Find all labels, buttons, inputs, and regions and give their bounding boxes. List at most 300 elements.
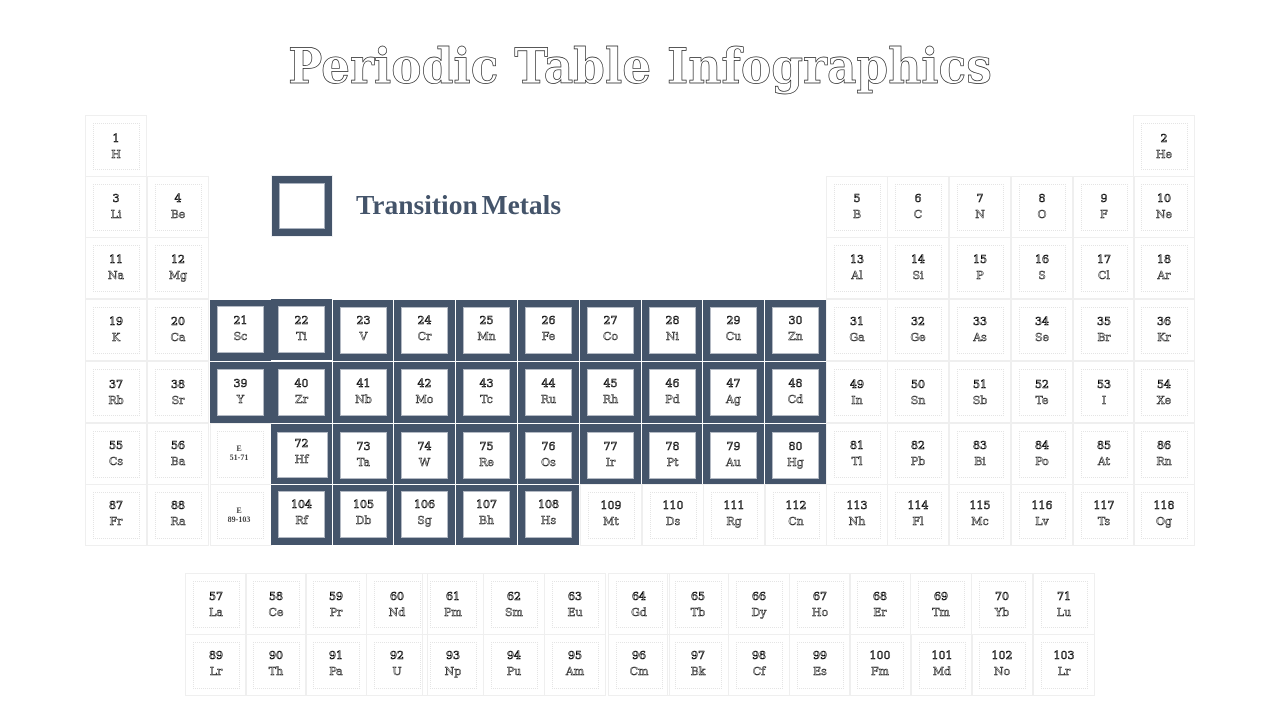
cell: Ds: 110: [662, 499, 684, 512]
cell: Pt, transition metal: 78: [666, 440, 680, 453]
cell: Tc, transition metal: [456, 362, 517, 423]
cell: Fe, transition metal: [518, 300, 579, 361]
cell: Gd: [608, 573, 670, 635]
cell: Li: 3: [112, 192, 120, 205]
cell: Re, transition metal: Re: [479, 456, 494, 469]
cell: V, transition metal: 23: [356, 314, 370, 327]
cell: Cu, transition metal: Cu: [726, 330, 741, 343]
cell: Og: 118: [1154, 499, 1174, 512]
cell: Rn: [1133, 423, 1195, 485]
cell: Cn: [765, 484, 827, 546]
cell: Rh, transition metal: [580, 362, 641, 423]
cell: Cd, transition metal: [765, 362, 826, 423]
cell: Ge: Ge: [910, 331, 926, 344]
lanthanide and actinide series: [185, 573, 1095, 696]
cell: Ag, transition metal: [703, 362, 764, 423]
cell: Fm: [849, 634, 911, 696]
cell: Xe: Xe: [1157, 394, 1171, 407]
cell: Lv: 116: [1032, 499, 1052, 512]
cell: Be: [147, 176, 209, 238]
cell: Fm: 100: [870, 649, 890, 662]
cell: Nd: [366, 573, 428, 635]
cell: Cf: [728, 634, 790, 696]
cell: Pa: 91: [329, 649, 343, 662]
cell: Ar: 18: [1157, 253, 1171, 266]
cell: B: B: [853, 208, 861, 221]
cell: Ti, transition metal: [271, 299, 332, 360]
cell: Hs, transition metal: Hs: [541, 514, 556, 527]
cell: Zr, transition metal: [271, 362, 332, 423]
cell: Tm: 69: [934, 590, 948, 603]
cell: Ta, transition metal: [333, 424, 393, 484]
cell: No: 102: [992, 649, 1012, 662]
cell: Tm: [910, 573, 972, 635]
cell: Se: [1011, 299, 1073, 361]
cell: B: 5: [854, 192, 860, 205]
cell: Fl: 114: [908, 499, 928, 512]
cell: Er: [849, 573, 911, 635]
cell: Cr, transition metal: [394, 300, 455, 361]
cell: K: [85, 299, 147, 361]
cell: Cm: [608, 634, 670, 696]
cell: Y, transition metal: Y: [237, 393, 244, 406]
cell: Er: 68: [873, 590, 887, 603]
cell: Sc, transition metal: 21: [234, 314, 248, 327]
cell: Br: [1073, 299, 1135, 361]
cell: Ts: 117: [1094, 499, 1114, 512]
cell: Cm: 96: [632, 649, 646, 662]
cell: Ni, transition metal: Ni: [666, 330, 679, 343]
cell: S: 16: [1035, 253, 1049, 266]
cell: Ba: 56: [171, 439, 185, 452]
cell: Es: Es: [813, 665, 827, 678]
cell: Ne: Ne: [1156, 208, 1172, 221]
cell: As: As: [973, 331, 987, 344]
cell: W, transition metal: [394, 424, 455, 484]
cell: Mc: Mc: [971, 515, 989, 528]
cell: Rg: Rg: [726, 515, 742, 528]
cell: K: K: [112, 331, 120, 344]
cell: Re, transition metal: 75: [480, 440, 494, 453]
cell: Hg, transition metal: 80: [788, 440, 802, 453]
cell: O: [1011, 176, 1073, 238]
cell: Fl: [887, 484, 949, 546]
cell: Au, transition metal: [703, 424, 764, 484]
cell: Ds: [642, 484, 704, 546]
cell: Tl: [826, 423, 888, 485]
cell: Mo, transition metal: Mo: [416, 393, 433, 406]
cell: Yb: Yb: [995, 606, 1009, 619]
cell: Ce: [245, 573, 307, 635]
cell: Sn: Sn: [911, 394, 925, 407]
cell: Te: 52: [1035, 378, 1049, 391]
cell: Co, transition metal: [580, 300, 641, 361]
cell: Cf: Cf: [753, 665, 765, 678]
cell: Dy: 66: [752, 590, 766, 603]
cell: Sg, transition metal: [394, 485, 455, 545]
cell: La: La: [209, 606, 223, 619]
cell: Gd: 64: [632, 590, 646, 603]
cell: Cd, transition metal: 48: [788, 377, 802, 390]
cell: H: [85, 115, 147, 177]
cell: F: 9: [1100, 192, 1108, 205]
cell: Mg: [147, 237, 209, 299]
cell: Sc, transition metal: [210, 300, 271, 361]
cell: P: P: [976, 269, 984, 282]
cell: Nb, transition metal: 41: [356, 377, 370, 390]
cell: Si: Si: [912, 269, 924, 282]
cell: Al: 13: [850, 253, 864, 266]
cell: Rb: 37: [109, 378, 123, 391]
cell: Co, transition metal: 27: [604, 314, 618, 327]
cell: Br: 35: [1097, 315, 1111, 328]
cell: C: C: [914, 208, 922, 221]
cell: Pb: 82: [911, 439, 925, 452]
cell: Cl: 17: [1097, 253, 1111, 266]
cell: Ga: Ga: [849, 331, 865, 344]
cell: Y, transition metal: [210, 362, 271, 423]
cell: Bk: 97: [691, 649, 705, 662]
cell: Ag, transition metal: Ag: [726, 393, 741, 406]
cell: Ne: [1133, 176, 1195, 238]
cell: Cu, transition metal: 29: [726, 314, 740, 327]
cell: Th: 90: [269, 649, 283, 662]
cell: Bi: 83: [973, 439, 987, 452]
cell: Zr, transition metal: 40: [294, 377, 308, 390]
cell: Ru, transition metal: [518, 362, 579, 423]
cell: N: 7: [976, 192, 984, 205]
cell: As: 33: [973, 315, 987, 328]
cell: Nh: [826, 484, 888, 546]
cell: H: 1: [112, 132, 120, 145]
cell: Ra: 88: [171, 499, 185, 512]
cell: Ru, transition metal: Ru: [541, 393, 556, 406]
cell: Mn, transition metal: Mn: [477, 330, 496, 343]
cell: Ac: [185, 634, 247, 696]
cell: Bk: [667, 634, 729, 696]
cell: Ba: Ba: [171, 455, 185, 468]
cell: Ne: 10: [1157, 192, 1171, 205]
cell: Tc, transition metal: 43: [480, 377, 494, 390]
cell: Zr, transition metal: Zr: [295, 393, 308, 406]
cell: Hf, transition metal: Hf: [295, 453, 308, 466]
cell: Na: 11: [109, 253, 123, 266]
cell: Sn: [887, 361, 949, 423]
cell: H: H: [111, 148, 121, 161]
cell: Sm: 62: [507, 590, 521, 603]
cell: Po: Po: [1035, 455, 1049, 468]
cell: Os, transition metal: 76: [542, 440, 556, 453]
cell: Hs, transition metal: [518, 485, 579, 545]
cell: Ho: 67: [813, 590, 827, 603]
cell: At: [1073, 423, 1135, 485]
cell: Cf: 98: [752, 649, 766, 662]
cell: Ho: Ho: [812, 606, 828, 619]
cell: Mt: Mt: [603, 515, 619, 528]
cell: Mn, transition metal: 25: [480, 314, 494, 327]
cell: Rh, transition metal: Rh: [603, 393, 618, 406]
cell: Pr: Pr: [330, 606, 342, 619]
cell: At: At: [1098, 455, 1110, 468]
cell: Cn: Cn: [788, 515, 804, 528]
cell: Ce: 58: [269, 590, 283, 603]
cell: Rb: Rb: [108, 394, 124, 407]
cell: Po: [1011, 423, 1073, 485]
cell: Tm: Tm: [932, 606, 950, 619]
cell: Gd: Gd: [631, 606, 647, 619]
cell: Pa: Pa: [329, 665, 343, 678]
cell: F: F: [1100, 208, 1108, 221]
cell: Rf, transition metal: 104: [291, 498, 312, 511]
cell: In: 49: [850, 378, 864, 391]
cell: Tb: 65: [691, 590, 705, 603]
cell: He: He: [1156, 148, 1172, 161]
cell: Rg: 111: [724, 499, 744, 512]
cell: Eu: [544, 573, 606, 635]
cell: lanthanide placeholder: [210, 423, 272, 485]
cell: P: [949, 237, 1011, 299]
cell: Mt: 109: [600, 499, 622, 512]
cell: Hg, transition metal: Hg: [787, 456, 804, 469]
cell: Ca: [147, 299, 209, 361]
cell: Bh, transition metal: 107: [476, 498, 497, 511]
cell: Pd, transition metal: Pd: [665, 393, 680, 406]
cell: Ga: [826, 299, 888, 361]
cell: Fm: Fm: [871, 665, 889, 678]
cell: Cs: [85, 423, 147, 485]
cell: Mn, transition metal: [456, 300, 517, 361]
cell: Mo, transition metal: [394, 362, 455, 423]
cell: F: [1073, 176, 1135, 238]
cell: Dy: [728, 573, 790, 635]
cell: Cs: Cs: [109, 455, 123, 468]
cell: U: U: [392, 665, 402, 678]
cell: B: [826, 176, 888, 238]
cell: P: 15: [973, 253, 987, 266]
cell: He: [1133, 115, 1195, 177]
cell: Mt: [580, 484, 642, 546]
cell: Tl: 81: [850, 439, 864, 452]
cell: C: 6: [914, 192, 922, 205]
cell: Db, transition metal: Db: [356, 514, 371, 527]
cell: At: 85: [1097, 439, 1111, 452]
cell: Pb: [887, 423, 949, 485]
cell: Pr: 59: [329, 590, 343, 603]
cell: Es: 99: [813, 649, 827, 662]
cell: Og: Og: [1156, 515, 1172, 528]
cell: Zn, transition metal: Zn: [788, 330, 803, 343]
cell: Cu, transition metal: [703, 300, 764, 361]
cell: Ta, transition metal: Ta: [357, 456, 370, 469]
cell: Es: [789, 634, 851, 696]
cell: Pd, transition metal: [642, 362, 702, 423]
cell: Md: Md: [933, 665, 951, 678]
cell: Pm: Pm: [444, 606, 462, 619]
cell: As: [949, 299, 1011, 361]
cell: Re, transition metal: [456, 424, 517, 484]
cell: Am: Am: [566, 665, 584, 678]
cell: Lr: 103: [1054, 649, 1074, 662]
cell: Ca: Ca: [170, 331, 185, 344]
cell: Nb, transition metal: Nb: [355, 393, 372, 406]
cell: Sr: [147, 361, 209, 423]
legend label: Transition Metals: [356, 189, 561, 220]
cell: Si: [887, 237, 949, 299]
cell: Si: 14: [911, 253, 925, 266]
cell: Md: 101: [932, 649, 952, 662]
cell: Yb: [971, 573, 1033, 635]
cell: Te: Te: [1036, 394, 1048, 407]
cell: Ac: Lr: [210, 665, 222, 678]
cell: Cr, transition metal: 24: [418, 314, 432, 327]
cell: Fr: Fr: [110, 515, 122, 528]
cell: N: [949, 176, 1011, 238]
cell: Zn, transition metal: 30: [788, 314, 802, 327]
cell: Ts: Ts: [1098, 515, 1110, 528]
cell: Eu: Eu: [567, 606, 583, 619]
cell: Ga: 31: [850, 315, 864, 328]
cell: Rn: Rn: [1156, 455, 1172, 468]
cell: Nd: 60: [390, 590, 404, 603]
cell: U: [366, 634, 428, 696]
cell: Ca: 20: [171, 315, 185, 328]
cell: Cs: 55: [109, 439, 123, 452]
cell: Lv: [1011, 484, 1073, 546]
cell: La: [185, 573, 247, 635]
cell: Pu: Pu: [507, 665, 521, 678]
cell: No: No: [994, 665, 1010, 678]
cell: Y, transition metal: 39: [234, 377, 248, 390]
cell: I: 53: [1097, 378, 1111, 391]
cell: Sc, transition metal: Sc: [234, 330, 247, 343]
cell: C: [887, 176, 949, 238]
cell: Cl: [1073, 237, 1135, 299]
cell: Mg: Mg: [169, 269, 187, 282]
cell: Os, transition metal: Os: [541, 456, 556, 469]
cell: Mo, transition metal: 42: [418, 377, 432, 390]
cell: V, transition metal: V: [360, 330, 367, 343]
cell: Pu: [483, 634, 545, 696]
cell: Ds: Ds: [666, 515, 680, 528]
cell: No: [971, 634, 1033, 696]
cell: Hs, transition metal: 108: [538, 498, 559, 511]
cell: Al: Al: [851, 269, 863, 282]
cell: Fl: Fl: [912, 515, 924, 528]
cell: Pd, transition metal: 46: [666, 377, 680, 390]
cell: Cm: Cm: [630, 665, 648, 678]
cell: Sn: 50: [911, 378, 925, 391]
cell: Pu: 94: [507, 649, 521, 662]
cell: actinide placeholder: E: [236, 506, 242, 515]
cell: Rh, transition metal: 45: [604, 377, 618, 390]
cell: Tb: [667, 573, 729, 635]
cell: Am: [544, 634, 606, 696]
cell: Ac: 89: [209, 649, 223, 662]
cell: Zn, transition metal: [765, 300, 826, 361]
cell: Eu: 63: [568, 590, 582, 603]
cell: Be: 4: [174, 192, 182, 205]
cell: Se: Se: [1035, 331, 1049, 344]
cell: Fr: 87: [109, 499, 123, 512]
cell: Ar: Ar: [1157, 269, 1171, 282]
cell: Rg: [703, 484, 765, 546]
cell: Tc, transition metal: Tc: [480, 393, 493, 406]
legend swatch: transition metals: [272, 176, 332, 236]
cell: Cd, transition metal: Cd: [788, 393, 803, 406]
cell: Nd: Nd: [389, 606, 405, 619]
title: Periodic Table Infographics: [288, 37, 992, 95]
cell: Ho: [789, 573, 851, 635]
cell: Bi: [949, 423, 1011, 485]
cell: Os, transition metal: [518, 424, 579, 484]
cell: Th: [245, 634, 307, 696]
cell: Nh: 113: [846, 499, 868, 512]
cell: Fe, transition metal: 26: [542, 314, 556, 327]
cell: Th: Th: [269, 665, 283, 678]
cell: Xe: 54: [1157, 378, 1171, 391]
cell: Ni, transition metal: [642, 300, 702, 361]
cell: N: N: [975, 208, 985, 221]
cell: Mc: 115: [970, 499, 990, 512]
cell: Sr: Sr: [172, 394, 184, 407]
cell: Al: [826, 237, 888, 299]
cell: Lu: 71: [1057, 590, 1071, 603]
cell: Rb: [85, 361, 147, 423]
cell: Md: [911, 634, 973, 696]
cell: Lu: [1033, 573, 1095, 635]
cell: Lu: Lu: [1057, 606, 1071, 619]
cell: Ir, transition metal: Ir: [606, 456, 615, 469]
cell: Fr: [85, 484, 147, 546]
cell: Db, transition metal: 105: [353, 498, 374, 511]
cell: Tl: Tl: [852, 455, 862, 468]
cell: W, transition metal: W: [419, 456, 430, 469]
cell: Np: 93: [446, 649, 460, 662]
cell: Cl: Cl: [1098, 269, 1110, 282]
cell: Pm: 61: [446, 590, 460, 603]
cell: Se: 34: [1035, 315, 1049, 328]
cell: Ir, transition metal: [580, 424, 641, 484]
cell: In: In: [851, 394, 863, 407]
cell: Bh, transition metal: [456, 485, 517, 545]
cell: Pa: [305, 634, 367, 696]
cell: K: 19: [109, 315, 123, 328]
cell: He: 2: [1160, 132, 1168, 145]
cell: Ni, transition metal: 28: [666, 314, 680, 327]
cell: Ts: [1073, 484, 1135, 546]
cell: Ra: Ra: [170, 515, 186, 528]
cell: Br: Br: [1097, 331, 1111, 344]
cell: Xe: [1133, 361, 1195, 423]
cell: Og: [1133, 484, 1195, 546]
cell: Tb: Tb: [691, 606, 705, 619]
cell: Bh, transition metal: Bh: [479, 514, 494, 527]
cell: Pt, transition metal: [642, 424, 702, 484]
cell: S: S: [1038, 269, 1046, 282]
cell: Er: Er: [873, 606, 887, 619]
cell: U: 92: [390, 649, 404, 662]
cell: I: [1073, 361, 1135, 423]
cell: O: 8: [1038, 192, 1046, 205]
periodic table main grid: [85, 115, 1195, 546]
cell: Cn: 112: [786, 499, 806, 512]
cell: Rn: 86: [1157, 439, 1171, 452]
cell: Ba: [147, 423, 209, 485]
cell: Na: [85, 237, 147, 299]
cell: Mc: [949, 484, 1011, 546]
cell: Ce: Ce: [269, 606, 283, 619]
cell: Sb: Sb: [973, 394, 987, 407]
